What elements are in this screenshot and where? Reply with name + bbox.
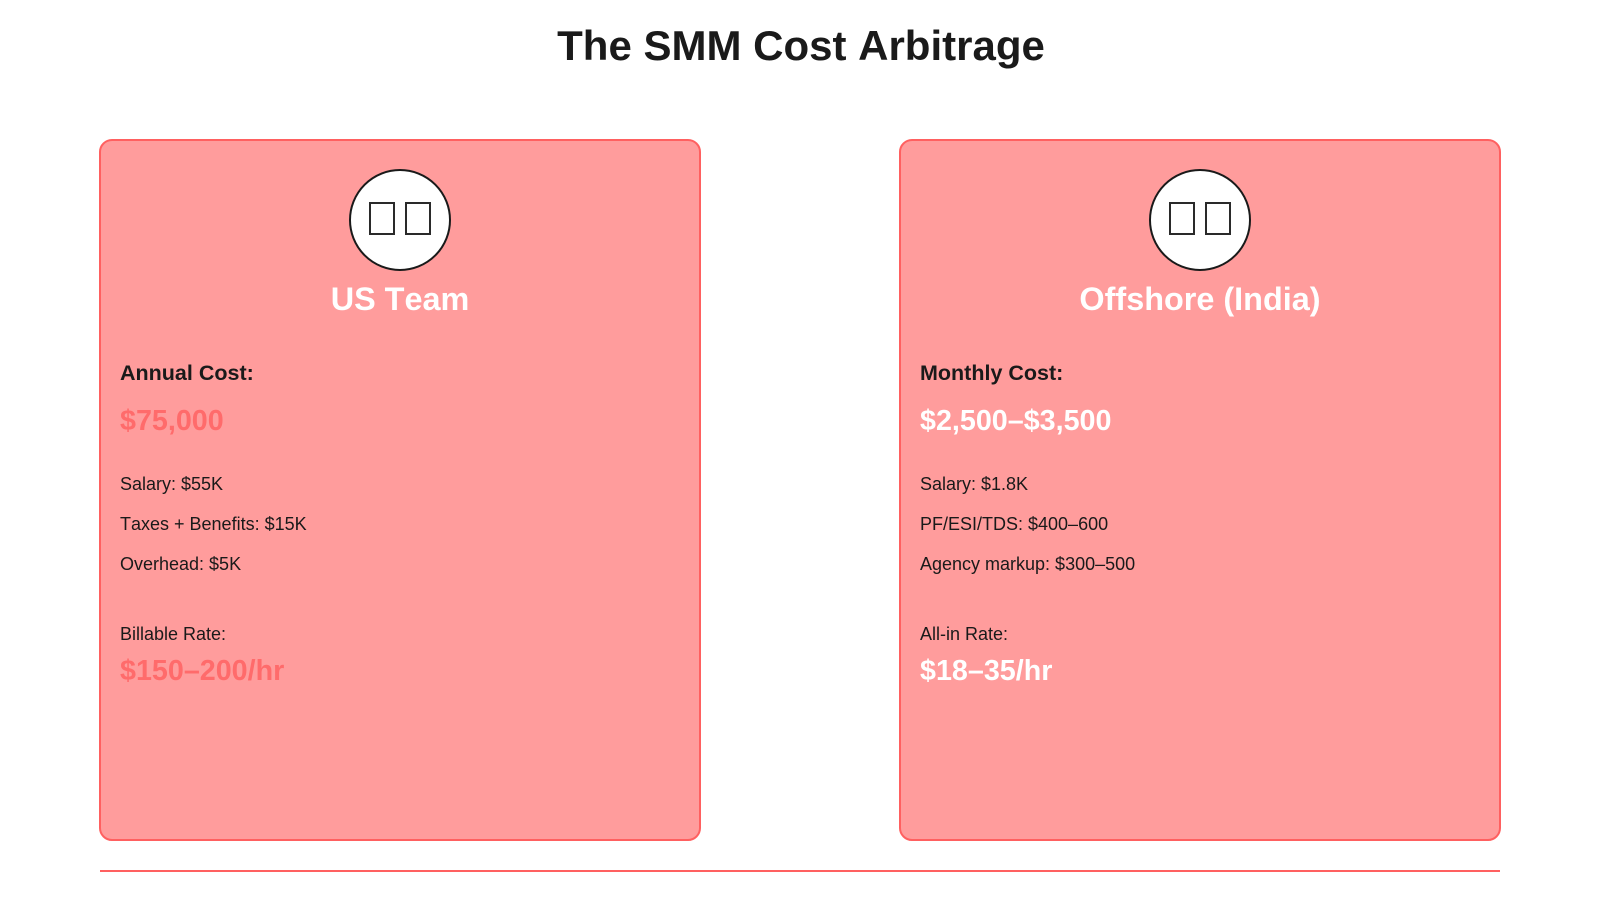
- heading: Offshore (India): Offshore (India): [1079, 281, 1321, 317]
- bottom rule: [100, 870, 1500, 872]
- all-in rate label: All-in Rate:: [920, 624, 1008, 644]
- monthly cost value: $2,500–$3,500: [920, 405, 1111, 437]
- panel: offshore India: [899, 139, 1501, 841]
- billable rate value: $150–200/hr: [120, 655, 284, 687]
- cost item: salary: Salary: $1.8K: [920, 474, 1028, 494]
- cost item: overhead: Overhead: $5K: [120, 554, 241, 574]
- cost item: salary: Salary: $55K: [120, 474, 223, 494]
- annual cost label: Annual Cost:: [120, 361, 254, 385]
- cost item: statutory: PF/ESI/TDS: $400–600: [920, 514, 1108, 534]
- all-in rate value: $18–35/hr: [920, 655, 1052, 687]
- annual cost value: $75,000: [120, 405, 224, 437]
- icon: US flag placeholder: [349, 169, 451, 271]
- cost item: agency markup: Agency markup: $300–500: [920, 554, 1135, 574]
- icon: India flag placeholder: [1149, 169, 1251, 271]
- billable rate label: Billable Rate:: [120, 624, 226, 644]
- panel: US team: [99, 139, 701, 841]
- monthly cost label: Monthly Cost:: [920, 361, 1063, 385]
- title: The SMM Cost Arbitrage: [557, 22, 1045, 69]
- cost item: taxes and benefits: Taxes + Benefits: $15K: [120, 514, 307, 534]
- heading: US Team: US Team: [331, 281, 469, 317]
